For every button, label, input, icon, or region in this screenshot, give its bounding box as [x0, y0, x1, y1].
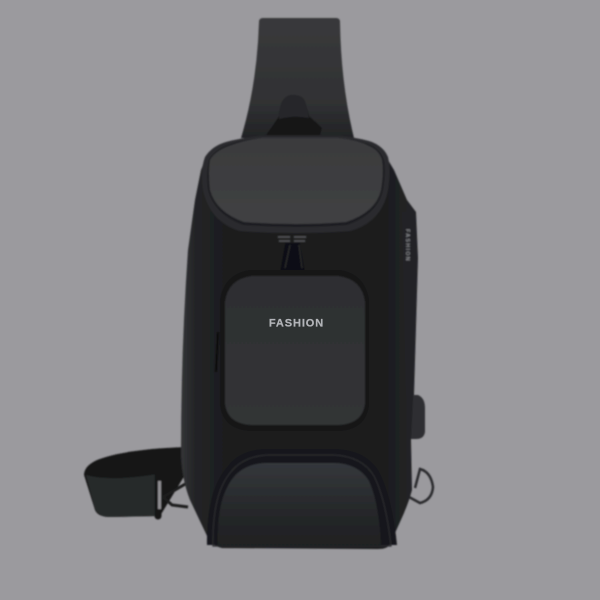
lower pocket: [207, 449, 397, 546]
front pocket: [216, 270, 369, 431]
FASHION logo: FASHION: [269, 318, 324, 330]
strap loop: [266, 95, 322, 135]
bag body: [181, 160, 416, 549]
top flap: [202, 136, 390, 233]
top shoulder strap: [241, 18, 354, 138]
USB port: [405, 395, 425, 439]
side panel with printed label: [402, 212, 418, 395]
pocket zipper: [216, 332, 218, 372]
strap buckle: [154, 474, 162, 516]
D-ring: [409, 469, 433, 503]
side panel with printed label: FASHION: [404, 229, 410, 262]
side webbing strap: [84, 447, 188, 517]
zipper pulls: [278, 237, 306, 271]
